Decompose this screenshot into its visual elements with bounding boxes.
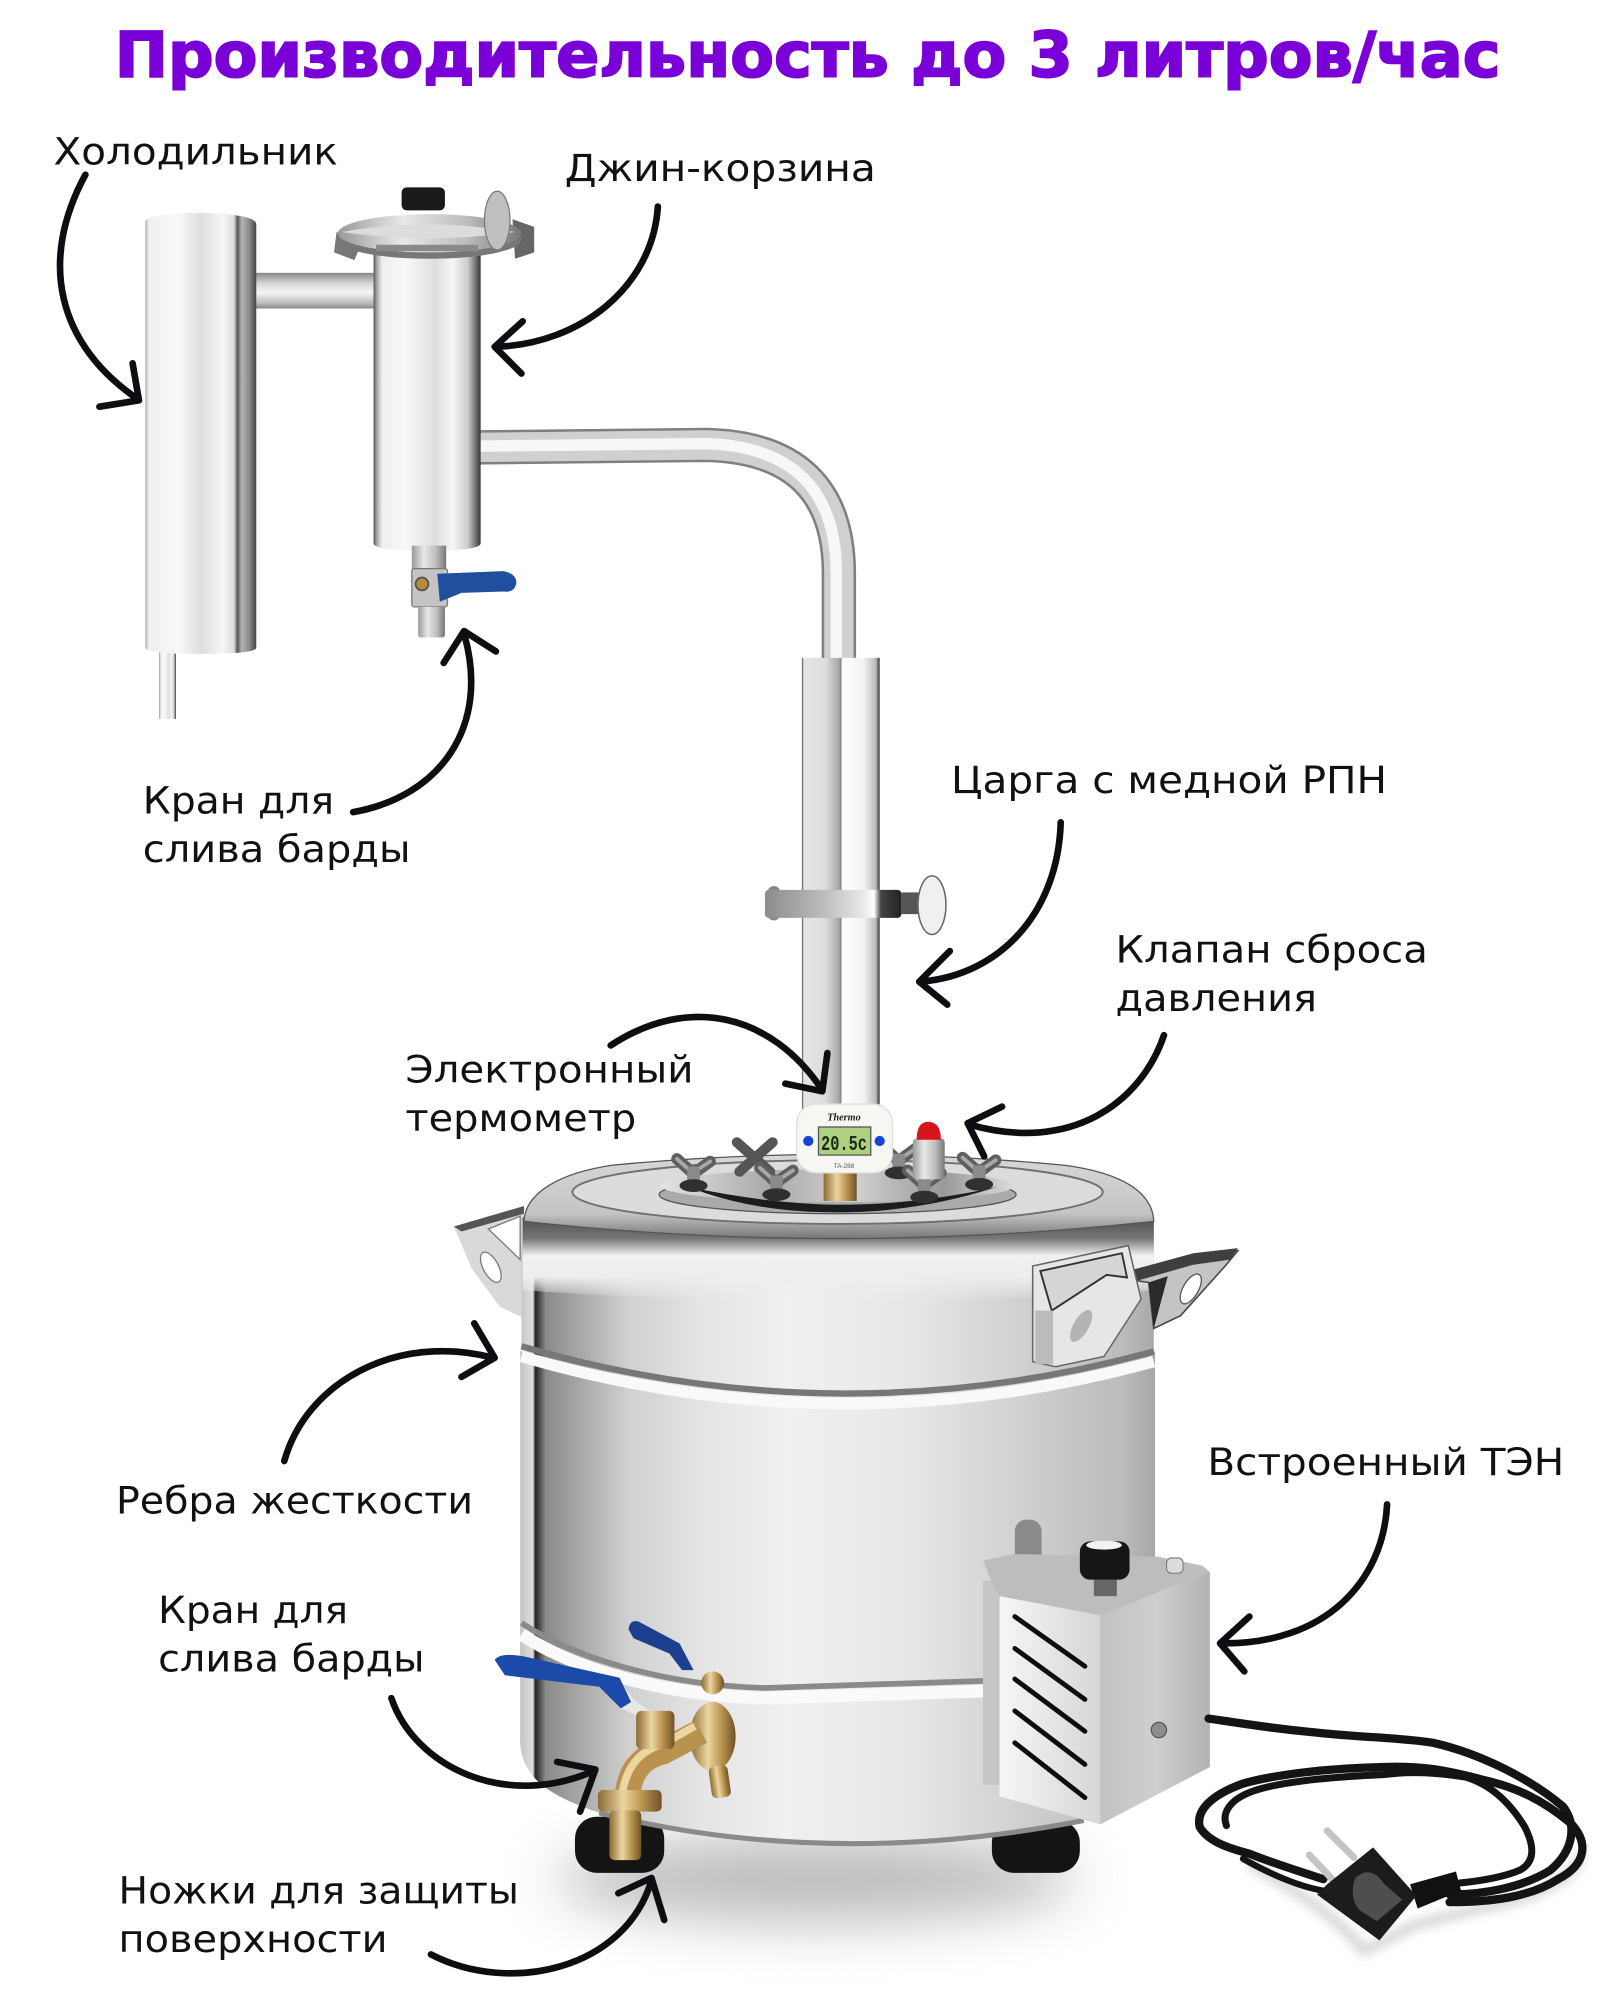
wing nuts	[677, 1142, 996, 1204]
brass thermometer fitting	[824, 1170, 857, 1201]
electronic thermometer: TA-288	[834, 1163, 855, 1170]
label: Джин-корзина: Джин-корзина	[565, 147, 876, 190]
plate dark crescent	[688, 1187, 997, 1212]
side screw	[1151, 1722, 1167, 1738]
cord	[1199, 1719, 1582, 1902]
electronic thermometer	[797, 1104, 892, 1173]
label: heater: Встроенный ТЭН	[1207, 1441, 1564, 1484]
connector pipe	[242, 273, 377, 309]
top plate	[983, 1554, 1210, 1615]
arrow to gin basket	[495, 207, 658, 374]
label: Холодильник: Холодильник	[54, 130, 338, 173]
plug grip	[1353, 1872, 1402, 1921]
lid plate rim	[659, 1175, 1016, 1214]
right foot	[992, 1821, 1080, 1873]
hose barb	[609, 1810, 641, 1860]
arrow to cooler	[60, 175, 139, 407]
strain relief	[1410, 1872, 1461, 1909]
bottom rim	[599, 1813, 1084, 1844]
control knob	[1080, 1541, 1130, 1596]
bottom drain tap	[495, 1621, 736, 1860]
power cord and plug	[1199, 1719, 1582, 1951]
label: feet: поверхности	[119, 1918, 388, 1961]
lid plate	[660, 1169, 1015, 1202]
electronic thermometer: Thermo	[827, 1113, 861, 1124]
boiler pot	[454, 1104, 1238, 1873]
floor shadow	[555, 1836, 1077, 1923]
tap lump	[690, 1702, 736, 1771]
label: lower drain tap: Кран для	[158, 1589, 348, 1632]
lower rib	[521, 1623, 1001, 1688]
handle 2	[629, 1621, 694, 1670]
gin basket body	[374, 242, 481, 551]
label: column: Царга с медной РПН	[951, 759, 1387, 802]
lid inner	[572, 1160, 1103, 1224]
plug body	[1317, 1847, 1416, 1940]
label: upper drain tap: Кран для	[143, 779, 334, 822]
basket black knob	[402, 187, 445, 210]
arrow to relief valve	[968, 1035, 1164, 1156]
electronic thermometer: 20.5c	[821, 1132, 867, 1157]
cooler spout	[159, 650, 176, 719]
column with copper packing	[765, 658, 946, 1119]
lid	[524, 1154, 1154, 1239]
side barb	[708, 1765, 731, 1799]
arrow to thermometer	[611, 1017, 827, 1091]
title: Производительность до 3 литров/час	[115, 18, 1501, 91]
label: upper drain tap: слива барды	[143, 828, 411, 871]
side face	[1100, 1572, 1210, 1824]
upper rib	[521, 1346, 1154, 1394]
label: thermometer: термометр	[405, 1097, 636, 1140]
upper rib highlight	[521, 1356, 1154, 1404]
arrow to upper drain tap	[353, 631, 496, 812]
valve top	[636, 1711, 674, 1749]
small fitting	[701, 1671, 724, 1694]
arrow to column	[919, 822, 1061, 1005]
arrow to ribs	[284, 1323, 495, 1461]
vent slots	[1015, 1617, 1085, 1798]
label: lower drain tap: слива барды	[158, 1637, 425, 1680]
lower body	[520, 1351, 1155, 1842]
arrow to feet	[431, 1878, 664, 1973]
label: ribs: Ребра жесткости	[116, 1479, 473, 1522]
upper body	[521, 1218, 1154, 1394]
lower rib highlight	[521, 1634, 1001, 1698]
front face	[1000, 1596, 1100, 1824]
mount strip	[983, 1581, 1001, 1785]
label: feet: Ножки для защиты	[119, 1869, 519, 1912]
wing screw	[484, 191, 510, 250]
shoulder band	[523, 1218, 1154, 1302]
right handle	[1033, 1246, 1238, 1367]
nozzle ring	[598, 1790, 662, 1812]
label: thermometer: Электронный	[405, 1048, 694, 1091]
outlet pipe	[467, 444, 839, 663]
cord shadow	[1249, 1855, 1581, 1951]
left foot	[575, 1817, 664, 1873]
cooler tube	[145, 213, 256, 654]
basket flange clamp	[334, 214, 534, 260]
left handle	[454, 1206, 524, 1318]
pressure relief valve	[913, 1122, 945, 1179]
label: relief valve: Клапан сброса	[1116, 929, 1428, 972]
arrow to heater	[1220, 1504, 1387, 1671]
drain tap upper	[412, 546, 516, 637]
rear post	[1015, 1520, 1042, 1583]
prongs	[1309, 1831, 1354, 1879]
column clamp	[765, 876, 946, 935]
small post	[1167, 1558, 1183, 1573]
tap core	[622, 1726, 695, 1795]
tap arm	[627, 1731, 701, 1798]
apparatus: cooler and gin basket	[145, 187, 839, 719]
column tube	[802, 658, 880, 1119]
heater box	[983, 1520, 1210, 1824]
lever chrome	[617, 1678, 653, 1719]
label: relief valve: давления	[1116, 977, 1317, 1020]
handle 1	[495, 1655, 631, 1708]
arrow to lower drain tap	[391, 1698, 595, 1812]
